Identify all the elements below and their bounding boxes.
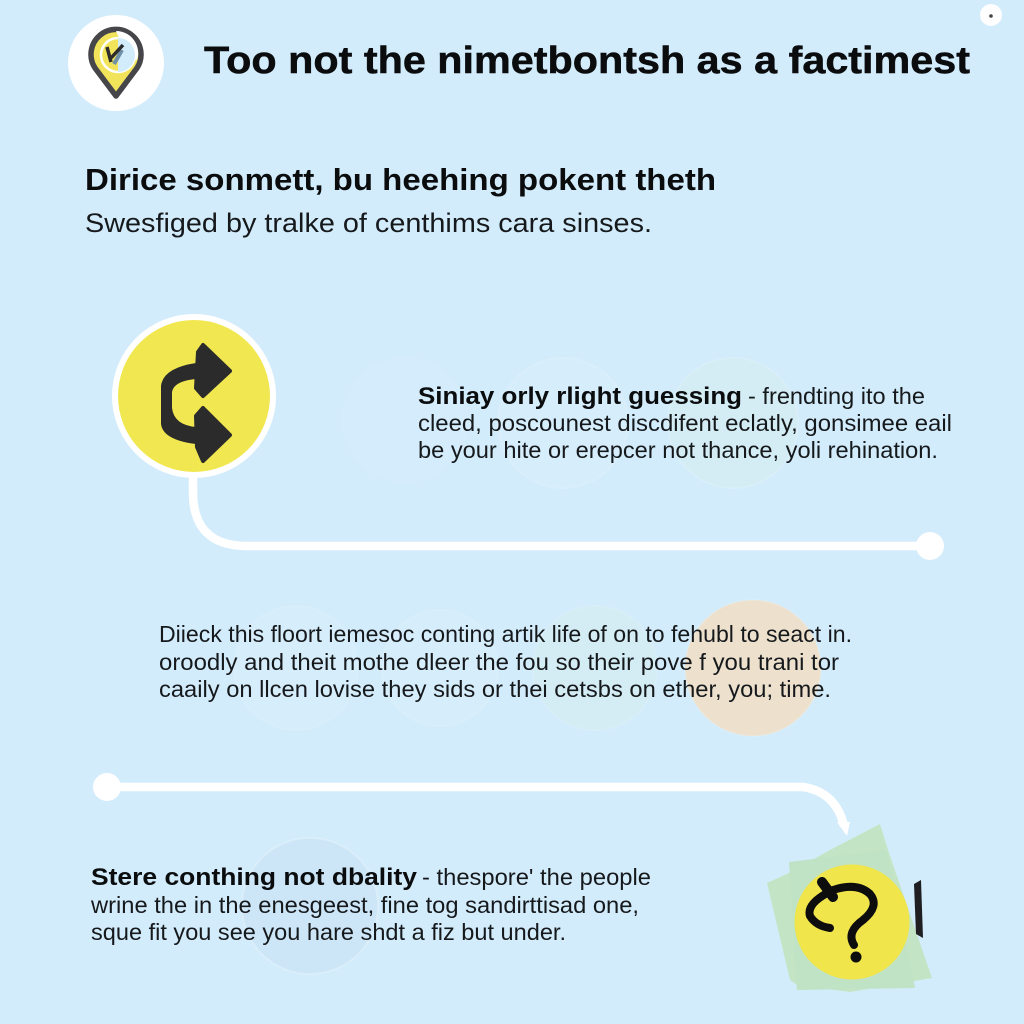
text block 3: [90, 864, 651, 945]
text block 1: Siniay orly rlight guessing: [418, 383, 742, 410]
text block 1: - frendting ito the: [748, 383, 925, 409]
text block 1: be your hite or erepcer not thance, yoli rehination.: [418, 437, 938, 463]
faint background circle: row 3: [242, 838, 378, 974]
text block 1: [418, 383, 952, 463]
text block 3: Stere conthing not dbality: [91, 864, 417, 891]
icon: yellow circle with double arrow: [115, 317, 273, 475]
icon: question mark on green notes: [767, 824, 932, 992]
text block 2: caaily on llcen lovise they sids or thei cetsbs on ether, you; time.: [159, 676, 831, 702]
text block 3: - thespore' the people: [422, 864, 651, 890]
text block 2: [159, 621, 852, 702]
faint background circles: row 1: [343, 358, 798, 488]
subheading: Dirice sonmett, bu heehing pokent theth: [85, 162, 716, 197]
icon: small corner badge: [980, 4, 1002, 26]
icon: location pin logo: [68, 15, 164, 111]
text block 3: sque fit you see you hare shdt a fiz but under.: [91, 919, 566, 945]
text block 1: cleed, poscounest discdifent eclatly, gonsimee eail: [418, 410, 952, 436]
text block 2: oroodly and theit mothe dleer the fou so their pove f you trani tor: [159, 649, 839, 675]
text block 2: Diieck this floort iemesoc conting artik life of on to fehubl to seact in.: [159, 621, 852, 647]
faint background circles: row 2: [234, 600, 821, 736]
title: Too not the nimetbontsh as a factimest: [204, 40, 970, 82]
connector line 2 with arrow: [93, 773, 850, 836]
intro text: Swesfiged by tralke of centhims cara sinses.: [85, 208, 652, 238]
connector line 1: [193, 470, 944, 560]
text block 3: wrine the in the enesgeest, fine tog sandirttisad one,: [90, 892, 639, 918]
